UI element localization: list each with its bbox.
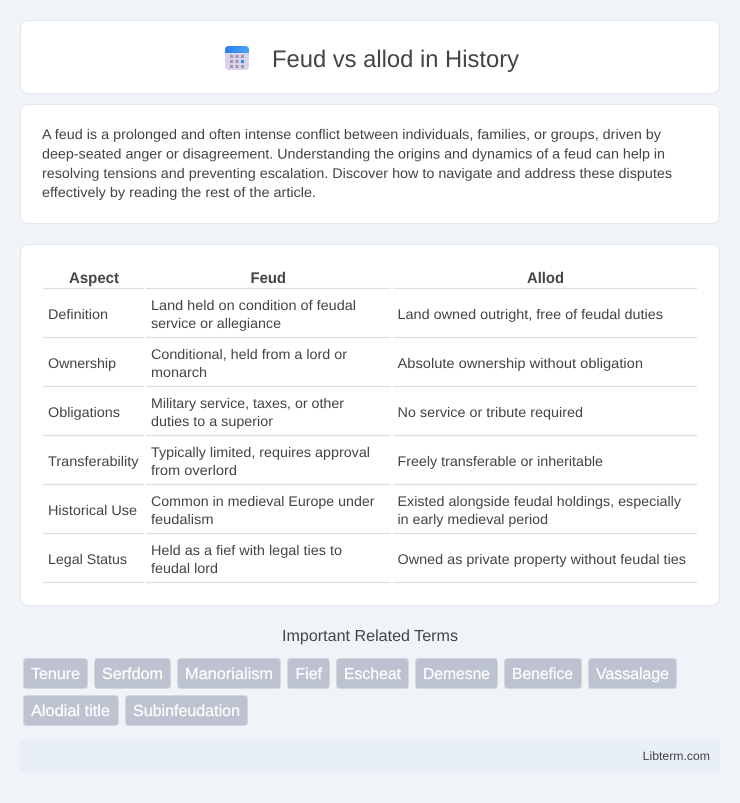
tag: Tenure	[24, 658, 88, 688]
table row: transferability: Typically limited, requires approval	[151, 444, 370, 460]
table row: historical use: Historical Use	[48, 502, 137, 518]
table row: ownership: monarch	[151, 364, 207, 380]
table row: legal status: feudal lord	[151, 560, 218, 576]
tag: Tenure: Tenure	[31, 666, 80, 683]
table row: legal status: Legal Status	[48, 551, 127, 567]
panel: comparison table	[20, 244, 720, 606]
table row: transferability: Freely transferable or inheritable	[398, 453, 603, 469]
tag: Demesne: Demesne	[423, 666, 490, 683]
text block: introduction paragraph: effectively by reading the rest of the article.	[42, 184, 316, 200]
tag: Serfdom	[94, 658, 170, 688]
text block: introduction paragraph	[42, 126, 672, 200]
table row: transferability	[43, 444, 697, 484]
table header row: Feud	[250, 270, 286, 287]
table row: historical use: feudalism	[151, 511, 214, 527]
tag: Subinfeudation: Subinfeudation	[133, 703, 240, 720]
text block: introduction paragraph: resolving tensions and preventing escalation. Discover how to navigate and address these disputes	[42, 165, 672, 181]
table row: legal status	[43, 542, 697, 582]
table row: historical use: Existed alongside feudal holdings, especially	[398, 493, 681, 509]
table row: legal status: Owned as private property without feudal ties	[398, 551, 686, 567]
tag: Escheat	[336, 658, 408, 688]
tag: Benefice	[504, 658, 582, 688]
table header row	[43, 270, 697, 288]
tag: Manorialism	[178, 658, 280, 688]
tag: Vassalage	[588, 658, 676, 688]
table row: definition: Land held on condition of feudal	[151, 297, 356, 313]
tag: Vassalage: Vassalage	[596, 666, 669, 683]
tag: Fief	[288, 658, 330, 688]
footer bar	[20, 739, 720, 773]
footer credit: Libterm.com	[643, 749, 710, 763]
panel: introduction	[20, 104, 720, 224]
table row: obligations: duties to a superior	[151, 413, 273, 429]
heading: important related terms: Important Related Terms	[282, 628, 458, 645]
table row: definition: service or allegiance	[151, 315, 281, 331]
icon: calendar	[225, 46, 249, 70]
tag: Benefice: Benefice	[512, 666, 573, 683]
table header row: Allod	[527, 270, 564, 287]
table row: transferability: Transferability	[48, 453, 138, 469]
table row: obligations: Obligations	[48, 404, 120, 420]
tag: Manorialism: Manorialism	[185, 666, 273, 683]
table row: ownership: Ownership	[48, 355, 116, 371]
table row: ownership	[43, 346, 697, 386]
table row: obligations: No service or tribute required	[398, 404, 583, 420]
table row: ownership: Absolute ownership without obligation	[398, 355, 643, 371]
table row: legal status: Held as a fief with legal ties to	[151, 542, 342, 558]
table row: transferability: from overlord	[151, 462, 237, 478]
tag: Alodial title: Alodial title	[31, 703, 110, 720]
text block: introduction paragraph: A feud is a prolonged and often intense conflict between individuals, families, or groups, driven by	[42, 126, 661, 142]
tag: Serfdom: Serfdom	[102, 666, 163, 683]
panel: title header	[20, 20, 720, 94]
tag: Alodial title	[24, 696, 118, 726]
tag: Fief: Fief	[296, 666, 323, 683]
table row: definition	[43, 297, 697, 338]
table row: historical use	[43, 493, 697, 534]
table row: historical use: in early medieval period	[398, 511, 548, 527]
table row: obligations	[43, 395, 697, 436]
related term tags	[24, 658, 676, 726]
table row: historical use: Common in medieval Europe under	[151, 493, 375, 509]
table row: definition: Land owned outright, free of feudal duties	[398, 306, 663, 322]
table header row: Aspect	[69, 270, 119, 287]
tag: Demesne	[416, 658, 498, 688]
table row: obligations: Military service, taxes, or other	[151, 395, 344, 411]
table row: ownership: Conditional, held from a lord or	[151, 346, 347, 362]
tag: Escheat: Escheat	[344, 666, 402, 683]
text block: introduction paragraph: deep-seated anger or disagreement. Understanding the origins and dynamics of a feud can help in	[42, 146, 665, 162]
tag: Subinfeudation	[126, 696, 248, 726]
table row: definition: Definition	[48, 306, 108, 322]
title: Feud vs allod in History	[272, 46, 519, 73]
